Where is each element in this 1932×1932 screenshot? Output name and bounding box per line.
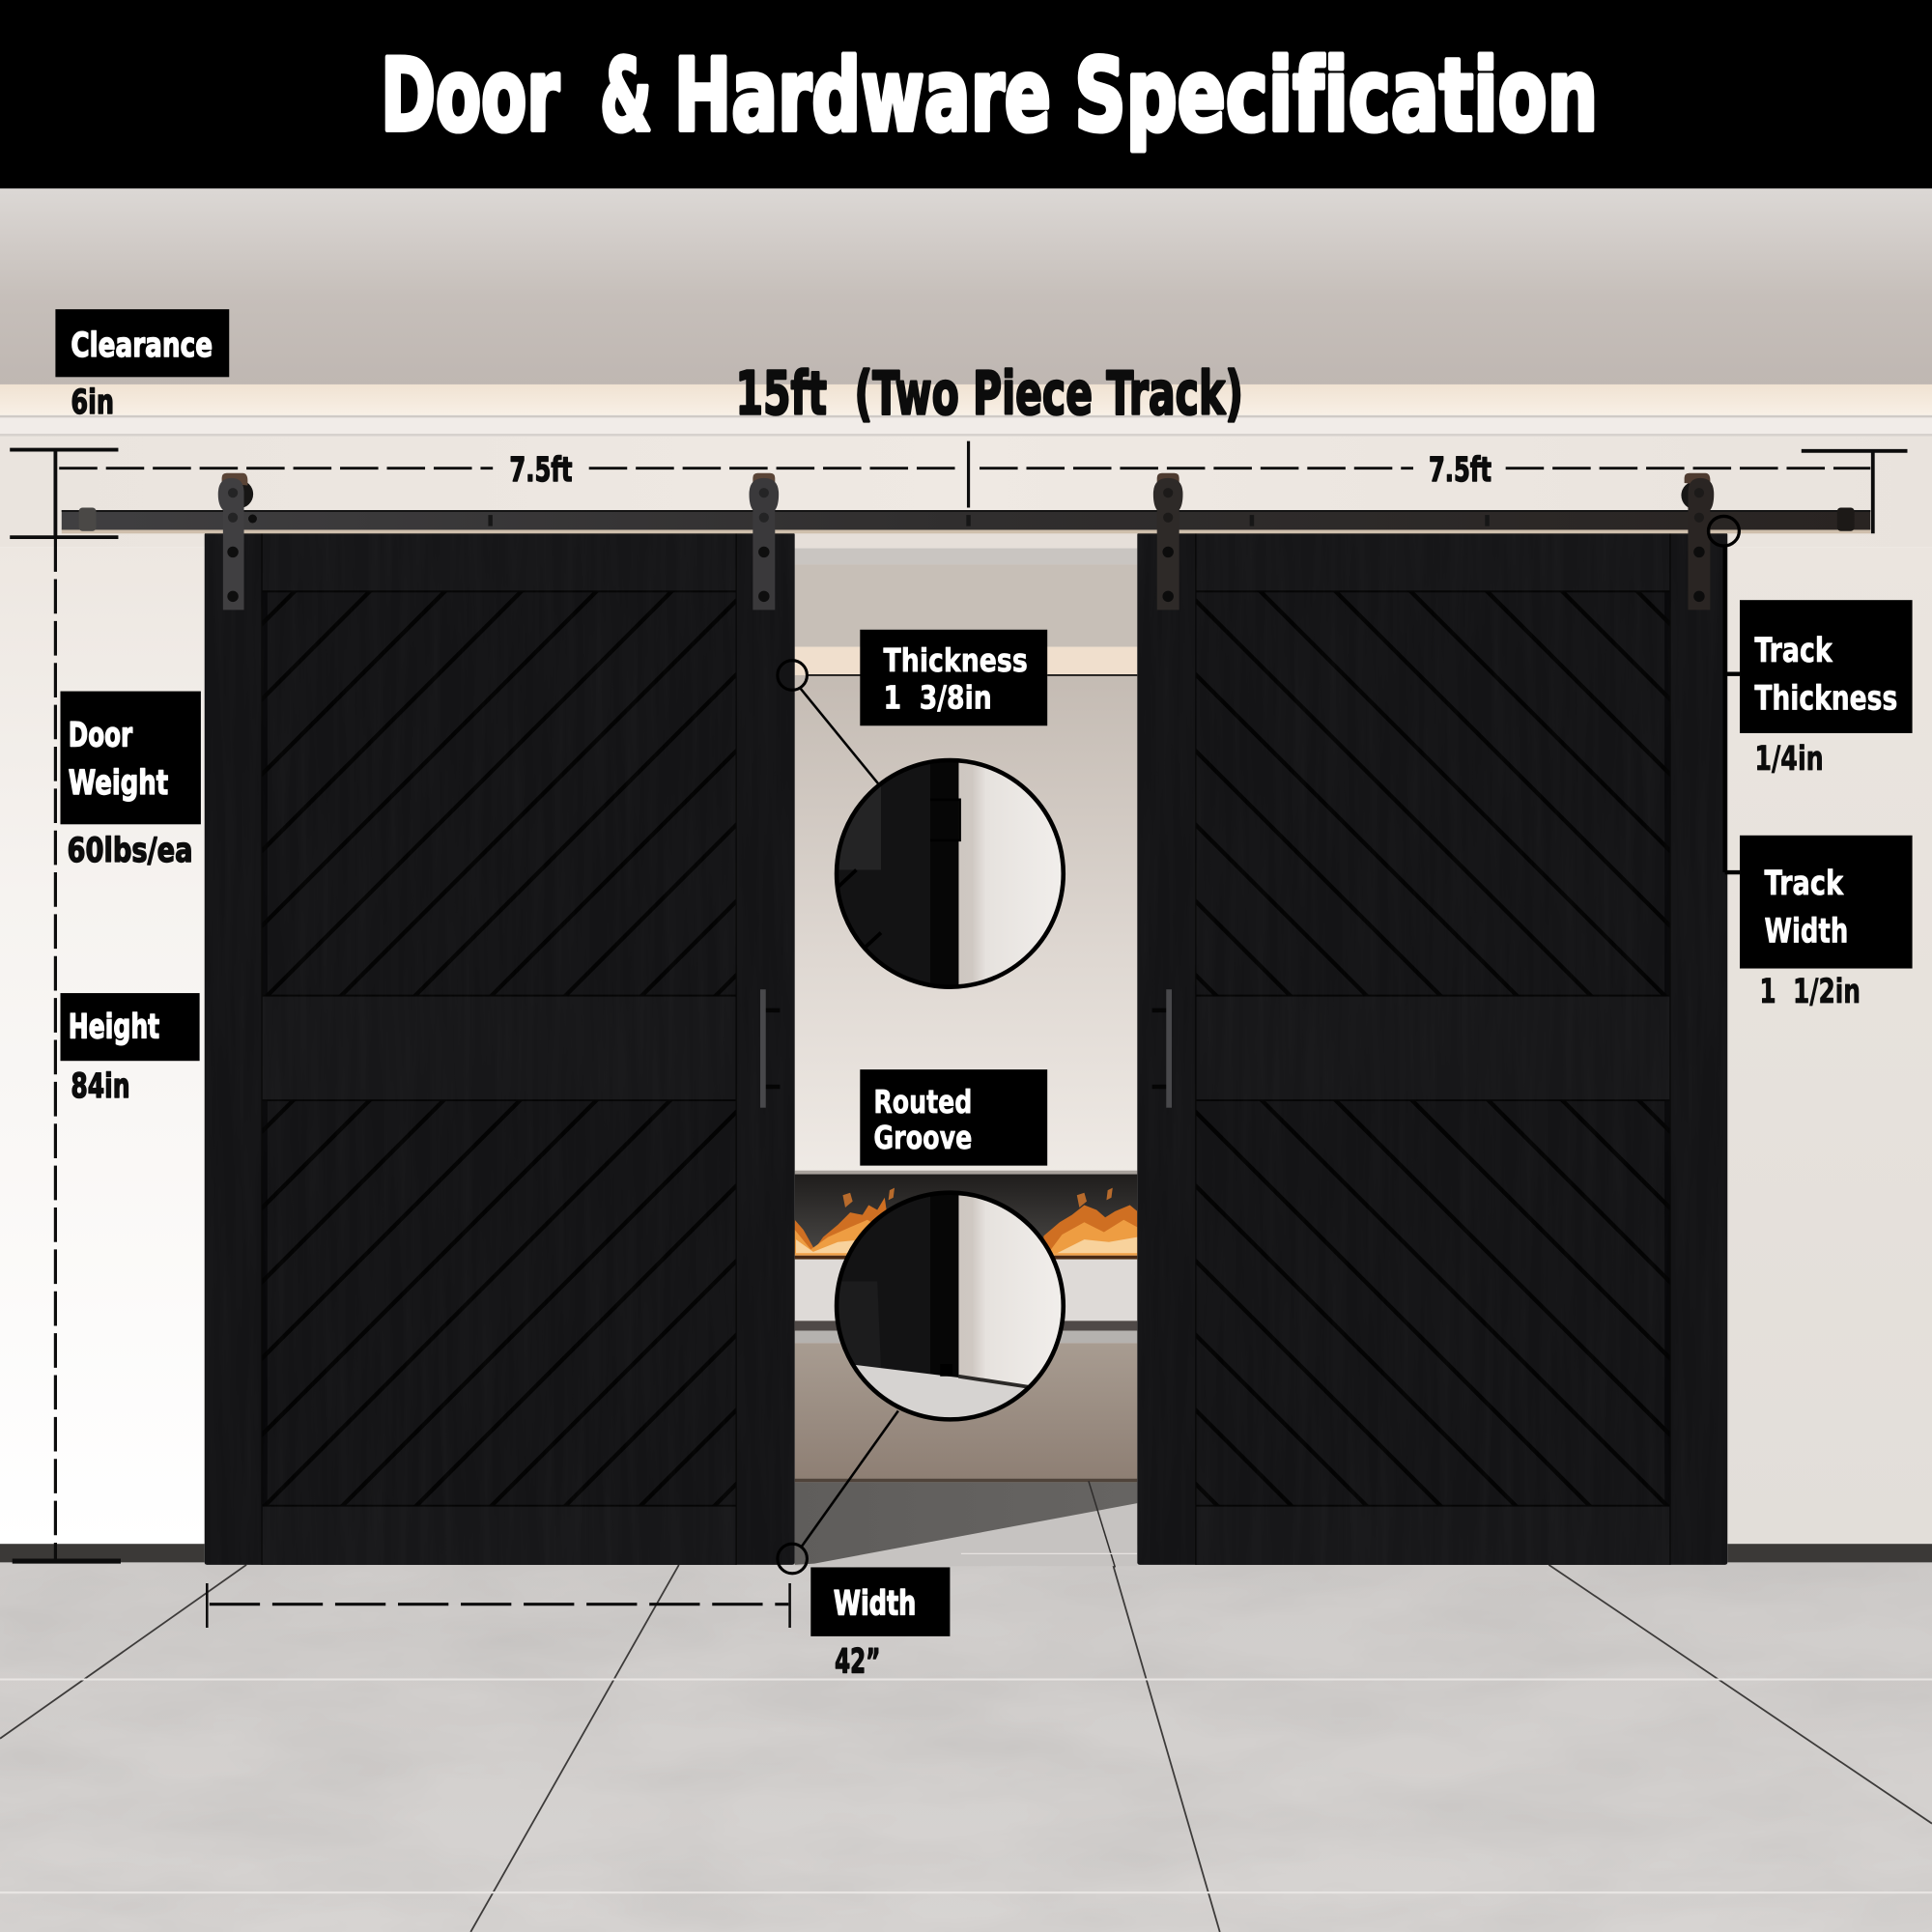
label: width: Width	[834, 1585, 916, 1624]
detail circle: door thickness	[837, 760, 1064, 987]
callout leader: thickness	[778, 661, 1137, 788]
label: 7.5ft left: 7.5ft	[509, 451, 572, 490]
track length heading: 15ft (Two Piece Track)	[735, 360, 1243, 429]
end stop: left	[79, 508, 96, 531]
label: routed groove: Routed	[873, 1083, 972, 1121]
title text: &	[600, 39, 652, 155]
opening between the doors: room beyond	[795, 532, 1137, 1567]
label: door weight: Door	[69, 716, 132, 754]
label: thickness: Thickness	[884, 641, 1028, 679]
door: right	[1137, 533, 1727, 1565]
label: width: 42”	[835, 1643, 880, 1682]
label: track thickness: Track	[1754, 632, 1833, 670]
dimension: door height	[13, 537, 121, 1561]
label: clearance: Clearance	[71, 327, 213, 365]
label: clearance: 6in	[71, 384, 114, 422]
label: thickness	[860, 630, 1047, 725]
label: track thickness: 1/4in	[1754, 740, 1824, 779]
door: left	[205, 533, 795, 1565]
label: routed groove: Groove	[873, 1119, 972, 1156]
track callout leader and marker	[1708, 516, 1740, 872]
end stop: right	[1837, 508, 1855, 531]
label: height	[60, 993, 200, 1106]
detail circle: routed groove	[837, 1193, 1064, 1419]
sliding track	[62, 508, 1870, 533]
label: width	[810, 1567, 950, 1682]
label: height: 84in	[71, 1067, 130, 1106]
dimension: track length	[10, 441, 1907, 537]
label: track width: Track	[1765, 865, 1844, 903]
floor tile joints	[0, 1481, 1932, 1932]
label: door weight: Weight	[69, 764, 168, 803]
label: clearance	[55, 309, 229, 422]
label: 7.5ft right: 7.5ft	[1429, 451, 1492, 490]
label: track width: Width	[1765, 913, 1848, 952]
label: routed groove	[860, 1069, 1047, 1166]
title text: Door	[381, 39, 559, 155]
hanger: 4	[1681, 473, 1714, 610]
title text: Specification	[1074, 39, 1598, 155]
label: track width: 1 1/2in	[1759, 973, 1861, 1011]
label: track thickness	[1740, 600, 1913, 779]
title text	[381, 39, 1598, 155]
handle: left door	[760, 989, 780, 1108]
label: thickness: 1 3/8in	[884, 678, 992, 716]
title text: Hardware	[674, 39, 1051, 155]
label: door weight	[60, 692, 201, 870]
dimension: door width	[207, 1583, 790, 1628]
hanger: 1	[218, 473, 257, 610]
label: height: Height	[69, 1009, 159, 1047]
hanger: 2	[750, 473, 779, 610]
hanger: 3	[1153, 473, 1182, 610]
label: door weight: 60lbs/ea	[68, 832, 193, 870]
handle: right door	[1152, 989, 1172, 1108]
fireplace flames	[795, 1188, 1137, 1260]
callout leader: width marker	[778, 1410, 898, 1574]
label: track width	[1740, 836, 1913, 1011]
title banner	[0, 0, 1932, 188]
